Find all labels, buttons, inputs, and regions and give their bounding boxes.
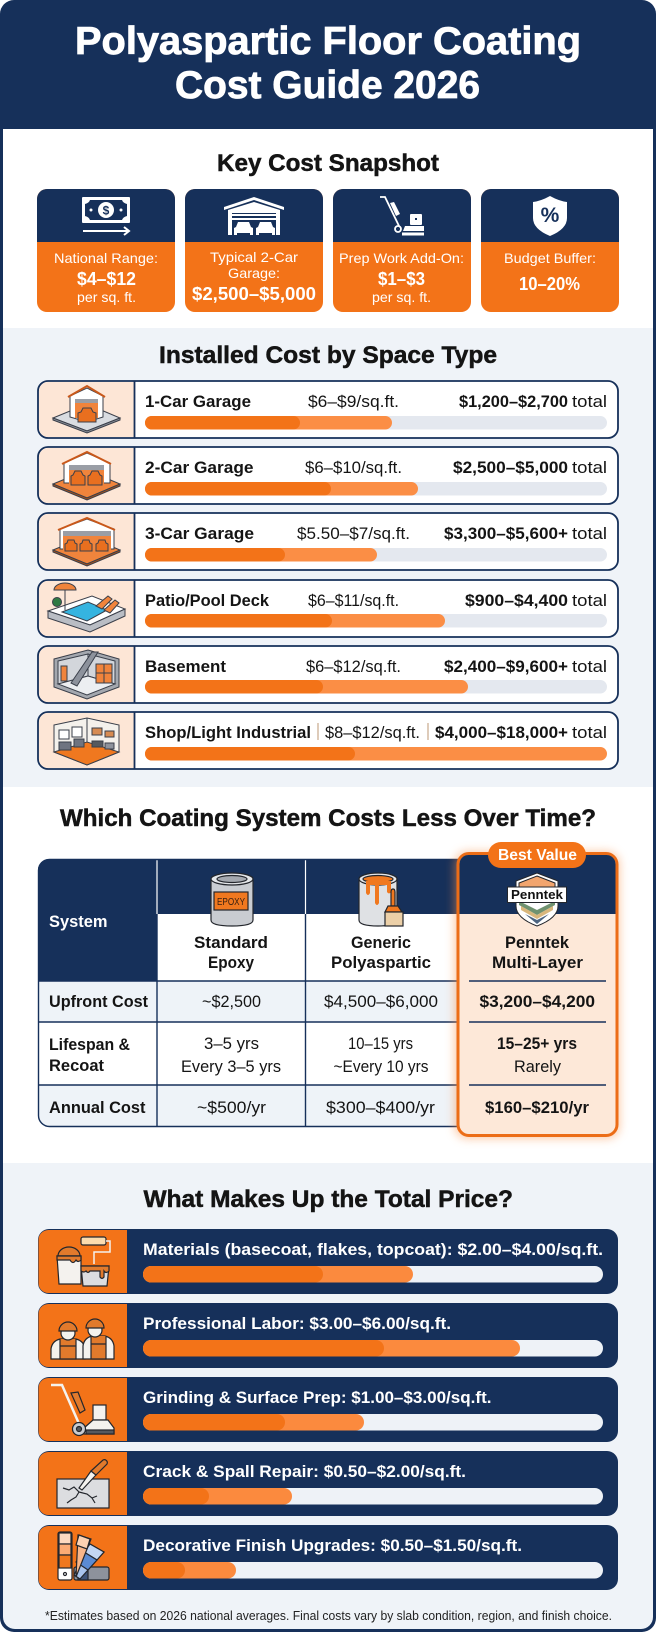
icon: grinder: [51, 1385, 114, 1436]
row: basement: Basement: [145, 657, 226, 676]
row: upfront cost: $4,500–$6,000: [324, 993, 438, 1011]
badge: best value: [488, 842, 586, 868]
icon: cracked slab and trowel: [57, 1460, 109, 1508]
comparison table: [38, 842, 619, 1138]
row: lifespan and recoat: 3–5 yrs: [204, 1035, 259, 1053]
row: 3-car garage: $5.50–$7/sq.ft.: [297, 525, 410, 543]
row: lifespan and recoat: 10–15 yrs: [348, 1035, 413, 1053]
row: shop/light industrial: total: [572, 724, 607, 742]
card: typical 2-car garage: Typical 2-Car: [210, 249, 298, 265]
row: lifespan and recoat: Recoat: [49, 1056, 104, 1075]
row: grinding and surface prep: Grinding & Surface Prep: $1.00–$3.00/sq.ft.: [143, 1388, 492, 1407]
card: budget buffer: [481, 189, 619, 312]
heading: key cost snapshot: Key Cost Snapshot: [217, 150, 439, 177]
card: national range: $4–$12: [77, 269, 136, 289]
separator: [318, 723, 428, 740]
row: 2-car garage: 2-Car Garage: [145, 458, 254, 477]
icon: pool deck: [48, 583, 125, 632]
row: 3-car garage: 3-Car Garage: [145, 524, 254, 543]
footnote: *Estimates based on 2026 national averages. Final costs vary by slab condition, region, and finish choice.: [45, 1608, 612, 1623]
row: lifespan and recoat: 15–25+ yrs: [497, 1034, 577, 1053]
column heading: standard epoxy: Standard: [194, 933, 268, 952]
row: 2-car garage: [38, 447, 618, 504]
row: basement: $6–$12/sq.ft.: [306, 658, 401, 676]
cost bar: [145, 680, 607, 694]
row: lifespan and recoat: Every 3–5 yrs: [181, 1058, 281, 1076]
row: 3-car garage: total: [572, 525, 607, 543]
column heading: penntek multi-layer: Multi-Layer: [492, 953, 583, 972]
row: materials: Materials (basecoat, flakes, topcoat): $2.00–$4.00/sq.ft.: [143, 1240, 603, 1259]
cost bar: [145, 614, 607, 628]
card: national range: National Range:: [54, 250, 158, 266]
row: basement: $2,400–$9,600+: [444, 657, 568, 676]
row: 2-car garage: $6–$10/sq.ft.: [305, 459, 402, 477]
heading: which coating system costs less: Which Coating System Costs Less Over Time?: [60, 805, 596, 832]
row: patio/pool deck: total: [572, 592, 607, 610]
icon: two-car garage: [53, 452, 120, 500]
icon: polyaspartic can with brush: [359, 873, 403, 926]
column heading: generic polyaspartic: Generic: [351, 933, 411, 952]
row: lifespan and recoat: Rarely: [514, 1058, 562, 1076]
row: 3-car garage: [38, 513, 618, 570]
icon: two workers: [51, 1319, 114, 1359]
row: lifespan and recoat: Lifespan &: [49, 1035, 130, 1054]
cost bar: [143, 1414, 603, 1430]
row: 1-car garage: $1,200–$2,700: [459, 392, 568, 411]
icon: penntek shield: [508, 873, 566, 926]
row: shop/light industrial: [38, 712, 618, 769]
panel: what makes up the total price: [38, 1186, 618, 1590]
row: 2-car garage: total: [572, 459, 607, 477]
row: crack and spall repair: Crack & Spall Repair: $0.50–$2.00/sq.ft.: [143, 1462, 466, 1481]
row: lifespan and recoat: [49, 1034, 577, 1076]
icon: two-car garage: [224, 197, 284, 235]
icon: three-car garage: [53, 518, 120, 566]
row: 1-car garage: 1-Car Garage: [145, 392, 251, 411]
row: upfront cost: $3,200–$4,200: [480, 992, 595, 1011]
row: shop/light industrial: Shop/Light Industrial: [145, 723, 311, 742]
row: grinding and surface prep: [38, 1377, 618, 1442]
card: budget buffer: Budget Buffer:: [504, 250, 596, 266]
row: 1-car garage: $6–$9/sq.ft.: [308, 393, 399, 411]
header: system: System: [49, 912, 108, 931]
header: title: [75, 20, 581, 107]
cost bar: [143, 1340, 603, 1356]
row: 1-car garage: [38, 381, 618, 438]
icon: floor grinder: [380, 197, 424, 236]
row: annual cost: Annual Cost: [49, 1098, 146, 1117]
row: annual cost: $300–$400/yr: [326, 1099, 436, 1117]
row: patio/pool deck: $6–$11/sq.ft.: [308, 592, 399, 610]
column heading: standard epoxy: [194, 933, 268, 972]
header: title: Cost Guide 2026: [175, 64, 480, 107]
row: basement: [38, 646, 618, 703]
icon: shop: [54, 718, 119, 765]
row: shop/light industrial: $8–$12/sq.ft.: [325, 724, 420, 742]
penntek glow: [455, 852, 619, 1138]
column heading: penntek multi-layer: Penntek: [505, 933, 570, 952]
card: typical 2-car garage: Garage:: [228, 265, 280, 281]
header: title: Polyaspartic Floor Coating: [75, 20, 581, 63]
cost bar: [143, 1562, 603, 1578]
heading: installed cost by space type: Installed Cost by Space Type: [159, 342, 497, 369]
row: 2-car garage: $2,500–$5,000: [453, 458, 568, 477]
cost bar: [145, 747, 607, 760]
cost bar: [145, 482, 607, 496]
row: lifespan and recoat: ~Every 10 yrs: [334, 1058, 428, 1076]
card: prep work add-on: $1–$3: [378, 269, 425, 289]
card: budget buffer: 10–20%: [519, 274, 580, 294]
row: 3-car garage: $3,300–$5,600+: [444, 524, 568, 543]
icon: epoxy can: EPOXY: [217, 897, 245, 908]
row: basement: total: [572, 658, 607, 676]
card: prep work add-on: per sq. ft.: [372, 289, 431, 305]
panel: key cost snapshot: [37, 150, 619, 312]
icon: paint buckets and roller: [57, 1237, 110, 1286]
icon: one-car garage: [53, 386, 120, 433]
row: decorative finish upgrades: Decorative Finish Upgrades: $0.50–$1.50/sq.ft.: [143, 1536, 522, 1555]
card: national range: per sq. ft.: [77, 289, 136, 305]
row: professional labor: Professional Labor: $3.00–$6.00/sq.ft.: [143, 1314, 451, 1333]
icon: penntek shield: Penntek: [511, 888, 563, 902]
row: shop/light industrial: $4,000–$18,000+: [435, 723, 568, 742]
icon: basement: [54, 650, 119, 699]
badge: best value: Best Value: [498, 847, 577, 864]
column heading: generic polyaspartic: Polyaspartic: [331, 953, 431, 972]
row: patio/pool deck: $900–$4,400: [465, 591, 568, 610]
icon: percent shield: %: [541, 204, 560, 227]
row: upfront cost: ~$2,500: [202, 993, 261, 1011]
row: upfront cost: [49, 992, 595, 1011]
cost bar: [143, 1266, 603, 1282]
row: decorative finish upgrades: [38, 1525, 618, 1590]
row: upfront cost: Upfront Cost: [49, 992, 148, 1011]
card: prep work add-on: Prep Work Add-On:: [339, 250, 464, 266]
heading: what makes up the total price: What Makes Up the Total Price?: [144, 1186, 513, 1213]
row: annual cost: [49, 1098, 589, 1117]
cost bar: [143, 1488, 603, 1504]
panel: installed cost by space type: [38, 342, 618, 769]
row: annual cost: $160–$210/yr: [485, 1098, 589, 1117]
row: annual cost: ~$500/yr: [197, 1099, 267, 1117]
row: crack and spall repair: [38, 1451, 618, 1516]
cost bar: [145, 416, 607, 430]
column heading: standard epoxy: Epoxy: [208, 953, 254, 972]
row: professional labor: [38, 1303, 618, 1368]
icon: color fan deck: [58, 1532, 109, 1580]
row: patio/pool deck: Patio/Pool Deck: [145, 591, 270, 610]
cost bar: [145, 548, 607, 562]
card: prep work add-on: [333, 189, 471, 312]
card: national range: [37, 189, 175, 312]
column heading: generic polyaspartic: [331, 933, 431, 972]
icon: money with arrow: $: [103, 204, 110, 218]
row: patio/pool deck: [38, 580, 618, 637]
card: typical 2-car garage: $2,500–$5,000: [192, 284, 316, 304]
column: penntek highlight: [458, 854, 617, 1136]
row: 1-car garage: total: [572, 393, 607, 411]
column heading: penntek multi-layer: [492, 933, 583, 972]
card: typical 2-car garage: [185, 189, 323, 312]
panel: coating comparison: [38, 805, 619, 1138]
row: materials: [38, 1229, 618, 1294]
icon: epoxy can: [211, 873, 253, 926]
